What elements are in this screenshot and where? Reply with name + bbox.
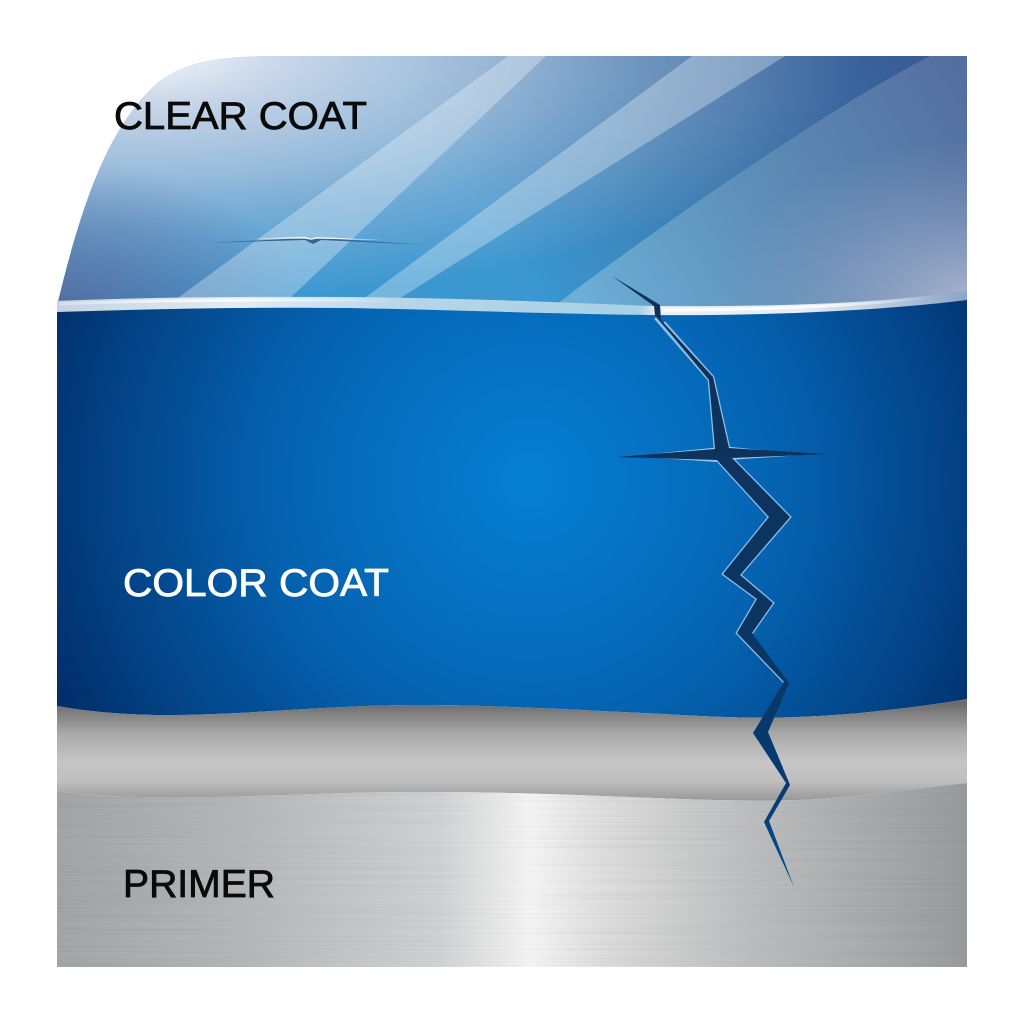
icon: main crack (612, 276, 827, 887)
clear coat bright edge (57, 291, 967, 315)
panel: primer metal layer (57, 780, 967, 967)
crack light edges (650, 318, 795, 682)
panel: middle primer band (57, 699, 967, 801)
paint layers diagram (57, 56, 967, 967)
crack fill (612, 276, 827, 887)
lighter wedge (547, 56, 967, 312)
heading: color coat label: COLOR COAT (123, 562, 389, 605)
light streaks (175, 56, 785, 300)
panel: color coat layer (57, 295, 967, 718)
heading: clear coat label: CLEAR COAT (114, 95, 367, 138)
panel: clear coat layer (57, 56, 967, 316)
heading: primer label: PRIMER (123, 863, 275, 906)
small scratch (207, 237, 427, 245)
